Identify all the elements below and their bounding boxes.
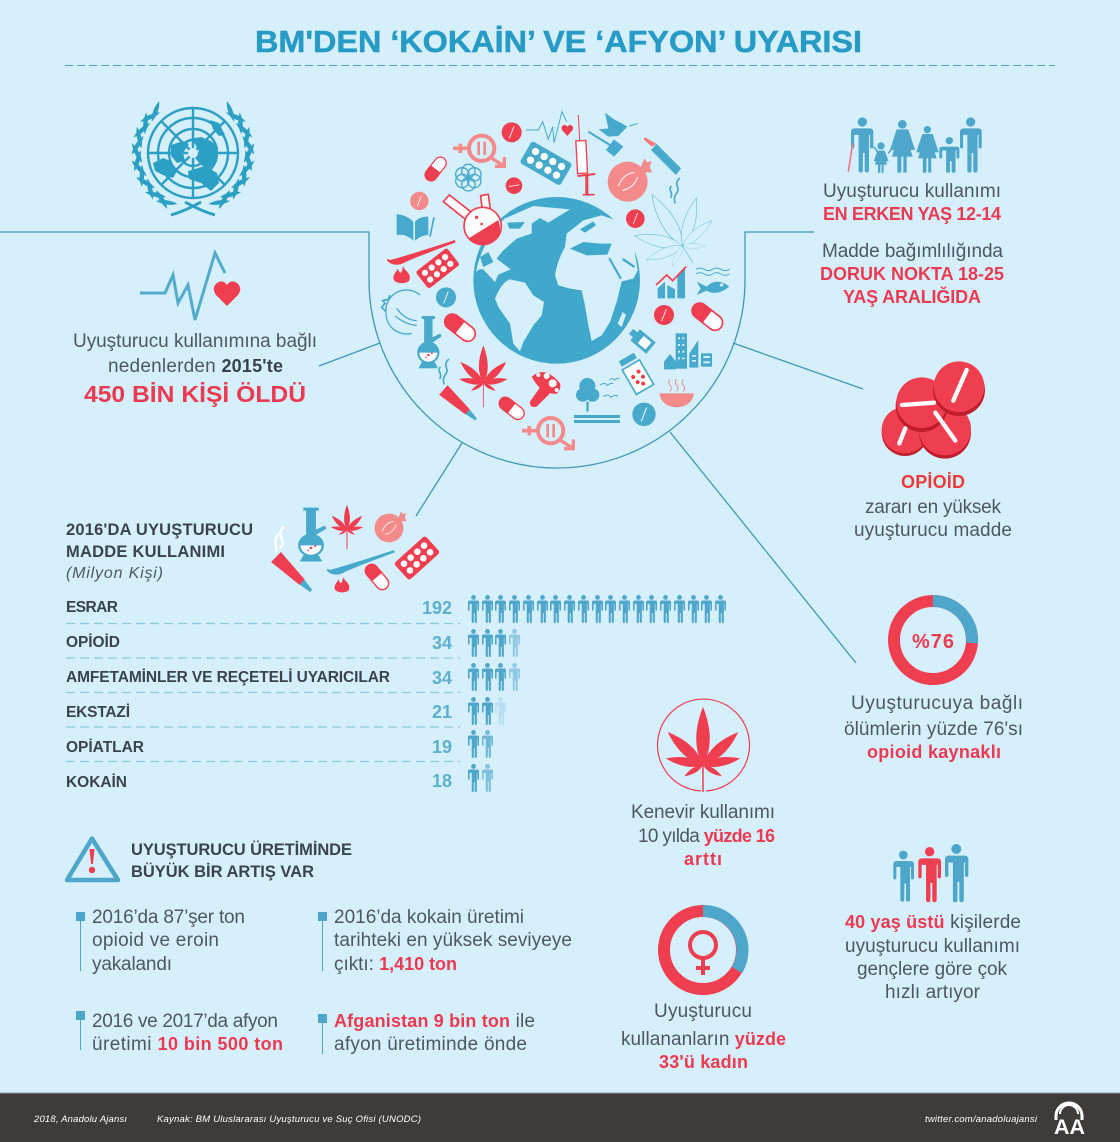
title: BM'DEN ‘KOKAİN’ VE ‘AFYON’ UYARISI	[255, 24, 862, 59]
heading: MADDE KULLANIMI	[66, 543, 225, 561]
text: description: Uyuşturucu	[654, 1001, 752, 1022]
icon: flower	[456, 164, 481, 191]
icon: mushroom	[530, 372, 560, 407]
text: description: arttı	[684, 849, 722, 869]
text: description: opioid kaynaklı	[867, 742, 1001, 762]
row: esrar: 192	[422, 598, 452, 618]
heading	[131, 840, 352, 881]
text: deaths description	[73, 331, 317, 377]
panel: age data	[820, 117, 1004, 307]
icon: growth chart	[656, 267, 686, 298]
text: description: kullananların yüzde	[621, 1029, 786, 1050]
icon: jar	[618, 352, 654, 394]
footer: credit: 2018, Anadolu Ajansı	[33, 1114, 127, 1125]
bullet: cocaine production: 2016’da kokain üretimi	[334, 907, 524, 928]
bullet: opioid heroin seizure: opioid ve eroin	[92, 930, 219, 951]
text: description: 40 yaş üstü kişilerde	[845, 912, 1021, 933]
footer: twitter: twitter.com/anadoluajansi	[925, 1114, 1038, 1125]
bullet: Afghanistan: Afganistan 9 bin ton ile	[334, 1011, 535, 1032]
icon: tree and birds	[574, 378, 620, 423]
row: opiates: 19	[432, 737, 452, 757]
heading: (Milyon Kişi)	[66, 565, 163, 582]
icon: capsules	[423, 155, 726, 422]
text: deaths figure: 450 BİN KİŞİ ÖLDÜ	[84, 381, 306, 407]
bullet: opioid heroin seizure: 2016’da 87’şer ton	[92, 907, 245, 928]
panel: 76 percent	[844, 601, 1023, 762]
donut chart with female symbol	[664, 911, 743, 989]
row: amphetamines	[66, 663, 520, 691]
panel: women	[621, 911, 786, 1072]
text: deaths description: nedenlerden 2015'te	[108, 356, 283, 377]
row: opioid: 34	[432, 633, 452, 653]
bullet: opium production: üretimi 10 bin 500 ton	[92, 1034, 283, 1055]
footer bar	[0, 1092, 1120, 1142]
row: esrar: ESRAR	[66, 599, 118, 616]
text: description: ölümlerin yüzde 76'sı	[844, 719, 1023, 740]
row: opioid	[66, 629, 520, 657]
panel: over 40	[845, 844, 1021, 1003]
text: description	[631, 802, 775, 869]
icon: bowl	[659, 379, 694, 407]
heading: 2016'DA UYUŞTURUCU	[66, 521, 253, 539]
text: description: gençlere göre çok	[857, 959, 1008, 980]
donut chart	[894, 601, 972, 679]
icon: bong	[417, 316, 442, 368]
central illustration: globe and icons	[382, 112, 729, 449]
row: ecstasy	[66, 697, 506, 725]
icon: book	[397, 214, 434, 241]
icon: bottle	[626, 326, 656, 354]
icon: syringe	[576, 115, 595, 195]
icon: spoon	[387, 240, 456, 265]
icon: gender symbols	[453, 136, 573, 449]
icon: poppy outline	[382, 290, 420, 334]
bullet: opium production	[76, 1011, 283, 1055]
text: earliest age	[823, 181, 1001, 224]
logo: AA: AA	[1054, 1116, 1085, 1139]
logo: AA	[1054, 1103, 1085, 1139]
footer: source: Kaynak: BM Uluslararası Uyuşturucu ve Suç Ofisi (UNODC)	[157, 1114, 421, 1125]
text: peak age: DORUK NOKTA 18-25	[820, 264, 1004, 284]
bullet: opioid heroin seizure: yakalandı	[92, 954, 172, 975]
text: description: Kenevir kullanımı	[631, 802, 775, 823]
icon: flask	[443, 194, 501, 245]
text: earliest age: EN ERKEN YAŞ 12-14	[823, 204, 1001, 224]
icon: pulse	[526, 112, 573, 143]
text: earliest age: Uyuşturucu kullanımı	[823, 181, 1001, 202]
row: cocaine: 18	[432, 771, 452, 791]
icon: opioid pills	[882, 361, 985, 459]
bullet: Afghanistan: afyon üretiminde önde	[334, 1034, 527, 1055]
row: amphetamines: 34	[432, 668, 452, 688]
icon: fish and waves	[696, 268, 729, 295]
text: opioid: OPİOİD	[901, 472, 965, 492]
text: description: hızlı artıyor	[885, 982, 981, 1003]
panel: opioid harm	[854, 361, 1012, 541]
icon cluster	[271, 505, 440, 596]
icon: smoke	[670, 178, 680, 203]
bullet: Afghanistan	[318, 1011, 535, 1055]
text: description: uyuşturucu kullanımı	[845, 936, 1020, 957]
heading: UYUŞTURUCU ÜRETİMİNDE	[131, 840, 352, 859]
icon: joint	[439, 385, 480, 424]
panel: deaths	[73, 253, 317, 407]
text: description: Uyuşturucuya bağlı	[851, 693, 1023, 714]
icon: lipstick	[644, 138, 681, 175]
text: percent value: %76	[912, 631, 954, 653]
icon: pulse and heart	[140, 253, 240, 320]
row: ecstasy: EKSTAZİ	[66, 704, 130, 721]
heading: BÜYÜK BİR ARTIŞ VAR	[131, 862, 314, 881]
icon: three people	[893, 844, 968, 902]
bullet: cocaine production	[318, 907, 572, 975]
bullet: cocaine production: çıktı: 1,410 ton	[334, 954, 457, 975]
text: peak age	[820, 241, 1004, 307]
icon: family	[848, 117, 982, 173]
row: cocaine: KOKAİN	[66, 774, 127, 791]
icon: UN emblem	[130, 100, 256, 215]
text: description	[621, 1001, 786, 1072]
globe	[473, 197, 640, 364]
row: amphetamines: AMFETAMİNLER VE REÇETELİ UYARICILAR	[66, 669, 390, 686]
text: description: 33'ü kadın	[659, 1052, 748, 1072]
central frame with connector lines	[0, 232, 863, 663]
text: peak age: Madde bağımlılığında	[822, 241, 1003, 262]
row: cocaine	[66, 764, 493, 792]
row: opioid: OPİOİD	[66, 634, 120, 651]
icon: red hemp leaf	[458, 345, 509, 407]
icon: dove and gavel	[588, 113, 638, 157]
text: opioid: uyuşturucu madde	[854, 520, 1012, 541]
row: opiates: OPİATLAR	[66, 739, 144, 756]
text: description: 10 yılda yüzde 16	[638, 826, 775, 847]
icon: flame	[393, 266, 410, 283]
icon: hemp leaf outline	[617, 174, 728, 284]
text: opioid	[854, 472, 1012, 541]
row: ecstasy: 21	[432, 702, 452, 722]
icon: pills	[410, 122, 674, 426]
row: opiates	[66, 730, 493, 758]
icon: smoke 2	[439, 359, 449, 384]
text: description	[844, 693, 1023, 762]
bullet: opioid heroin seizure	[76, 907, 245, 975]
heading	[66, 521, 253, 582]
text: peak age: YAŞ ARALIĞIDA	[843, 286, 981, 307]
panel: hemp use	[631, 699, 775, 869]
row: esrar	[66, 595, 726, 623]
icon: poppy head	[608, 158, 652, 202]
text: opioid: zararı en yüksek	[865, 497, 1002, 518]
text: deaths description: Uyuşturucu kullanımına bağlı	[73, 331, 317, 352]
panel: production increase	[67, 838, 572, 1055]
text: description	[845, 912, 1021, 1003]
icon: red leaf in circle	[658, 699, 750, 792]
bullet: opium production: 2016 ve 2017’da afyon	[92, 1011, 278, 1032]
icon: blister packs	[415, 141, 573, 289]
bullet: cocaine production: tarihteki en yüksek seviyeye	[334, 930, 572, 951]
icon: warning triangle	[67, 838, 118, 880]
panel: 2016 substance use	[66, 505, 726, 792]
icon: city	[664, 333, 712, 369]
